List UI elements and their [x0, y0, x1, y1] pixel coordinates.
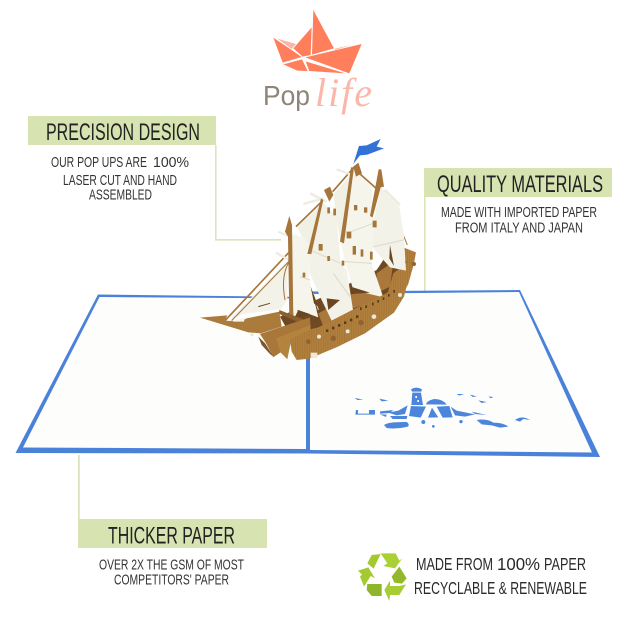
- left page: [23, 297, 306, 449]
- jib sail: [229, 261, 288, 320]
- sail column 2: [310, 201, 353, 321]
- yard arm tips: [276, 169, 403, 261]
- text block: paper description: COMPETITORS' PAPER: [114, 572, 229, 588]
- heading bar: [424, 168, 612, 197]
- text block: paper description: [99, 558, 244, 588]
- gun ports: [326, 290, 395, 332]
- icon: origami paper boat: [273, 10, 362, 73]
- panel: thicker paper: [78, 519, 267, 588]
- text block: precision description: ASSEMBLED: [89, 188, 152, 204]
- bowsprit deck: [200, 312, 282, 333]
- panel: recyclable: [358, 553, 587, 601]
- main hull side: [290, 273, 410, 360]
- connector lines: [78, 145, 426, 519]
- sail column 1: [292, 233, 318, 320]
- icon: recycling arrows: [358, 553, 407, 601]
- card blue backing: [16, 290, 600, 457]
- pop-up sailing ship: [200, 139, 416, 360]
- sail column 3: [341, 169, 383, 297]
- text block: recycled paper claim: 100%: [497, 554, 540, 574]
- text block: materials description: [441, 205, 597, 236]
- logo word: Pop: Pop: [263, 80, 310, 111]
- sail cutouts: [297, 205, 394, 317]
- rigging stays: [296, 167, 407, 245]
- panel: quality materials: [424, 168, 612, 236]
- text block: recycled paper claim: PAPER: [544, 554, 586, 574]
- ship interior shadow: [280, 245, 412, 347]
- text block: paper description: OVER 2X THE GSM OF MOST: [99, 558, 244, 574]
- text block: precision description: LASER CUT AND HAND: [63, 173, 177, 189]
- stern upper hull: [387, 245, 416, 302]
- inner deck planks: [318, 262, 393, 327]
- upper sails: [297, 204, 321, 247]
- text block: precision description: 100%: [153, 155, 189, 171]
- jib stays: [225, 253, 289, 321]
- heading bar: [28, 116, 216, 145]
- masts: [285, 163, 384, 318]
- text block: recycled paper claim: MADE FROM: [416, 554, 493, 574]
- pop-up card: [16, 139, 600, 457]
- text block: recycled paper claim: [414, 554, 587, 598]
- text block: materials description: FROM ITALY AND JAPAN: [455, 220, 583, 236]
- logo: Poplife: [263, 10, 372, 115]
- text block: precision description: OUR POP UPS ARE: [51, 155, 147, 171]
- deck railing: [279, 310, 305, 325]
- white jib tip: [233, 317, 245, 322]
- logo word: life: life: [315, 70, 372, 115]
- text block: precision description: [51, 155, 189, 204]
- prow layers: [260, 317, 311, 357]
- pennant flag: [353, 139, 384, 164]
- sail fold lines: [300, 223, 403, 310]
- heading: precision design: PRECISION DESIGN: [46, 119, 200, 146]
- sail column 4: [372, 187, 406, 271]
- heading: thicker paper: THICKER PAPER: [108, 522, 235, 550]
- lighthouse cutout: [355, 388, 530, 428]
- right page: [310, 292, 592, 452]
- panel: precision design: [28, 116, 216, 204]
- heading bar: [78, 519, 267, 548]
- hull ornaments: [311, 293, 402, 358]
